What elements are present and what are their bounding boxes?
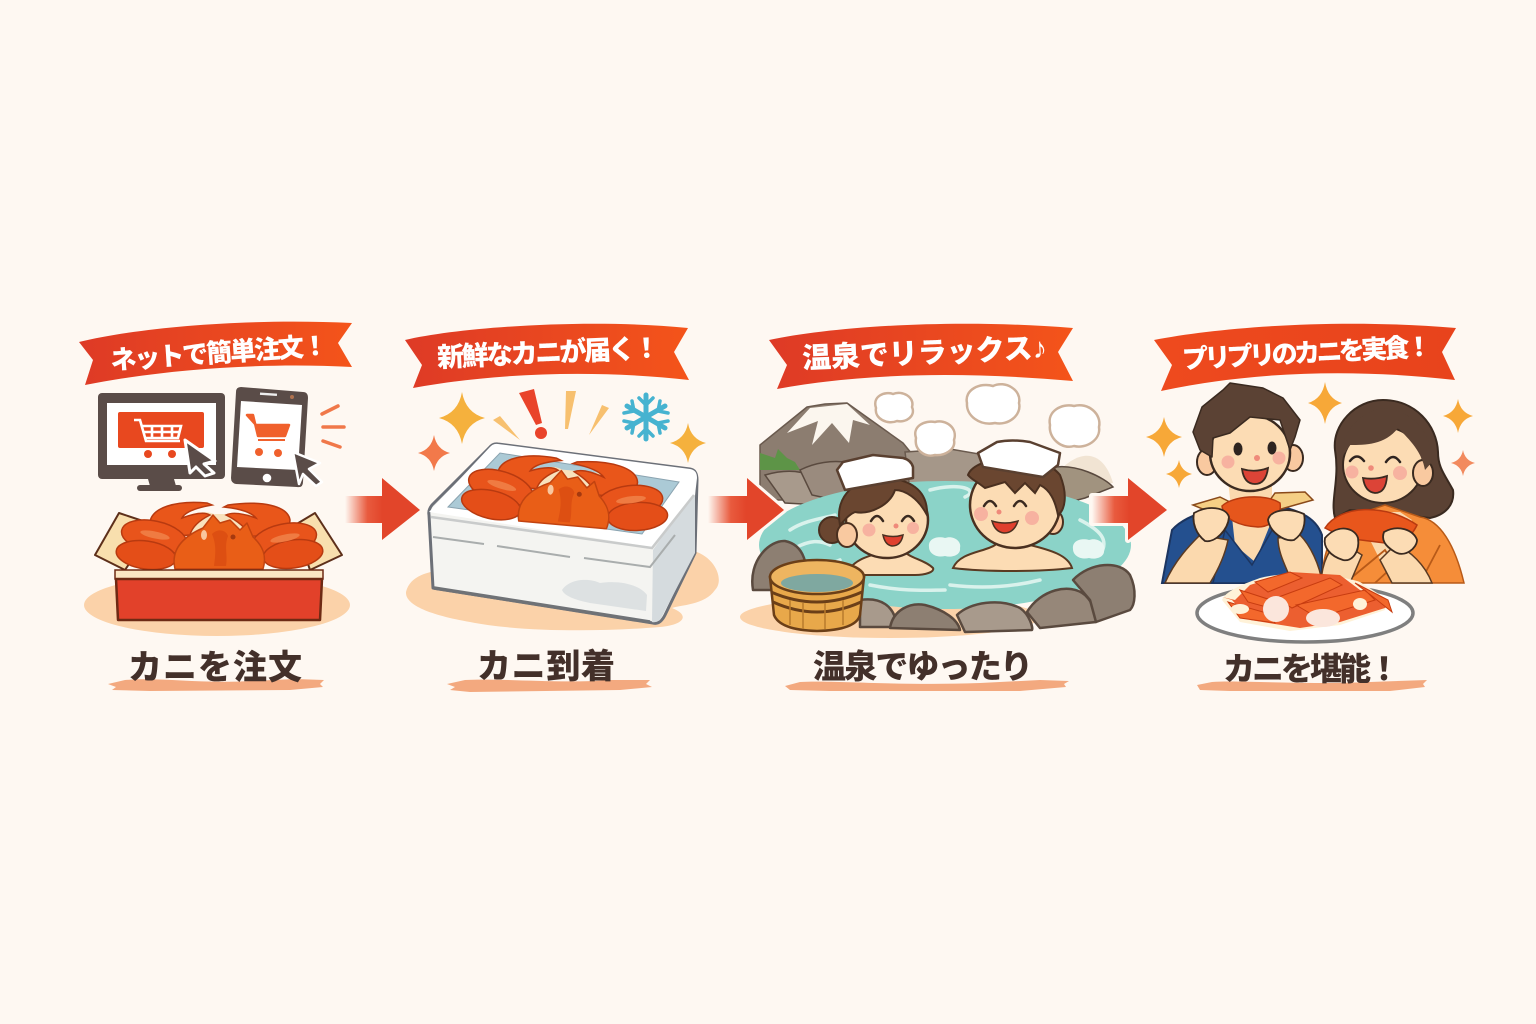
ribbon: eat: プリプリのカニを実食！: [1181, 331, 1433, 375]
icon: smartphone with cart: [231, 387, 322, 487]
label: arrives: [447, 648, 652, 692]
panel: order crab: [79, 322, 352, 691]
foam: [929, 537, 1104, 559]
icon: wooden bucket: [770, 560, 864, 631]
label: order crab: カニを注文: [128, 649, 302, 687]
sparkles: [418, 392, 706, 471]
sparkles: [1146, 382, 1475, 488]
label: relax: 温泉でゆったり: [813, 648, 1033, 685]
ground blob: [406, 550, 719, 630]
icon: desktop monitor with cart: [98, 393, 225, 491]
water: [759, 481, 1131, 609]
ribbon: order: [79, 322, 352, 385]
ribbon: order: ネットで簡単注文！: [109, 330, 329, 375]
mountain and back rocks: [760, 403, 1113, 505]
arrow 2: [708, 478, 784, 540]
label: enjoy: [1197, 651, 1427, 691]
label: arrives: カニ到着: [477, 648, 615, 686]
rocks: [752, 541, 1135, 632]
arrow 1: [345, 478, 420, 540]
ribbon: arrives: 新鮮なカニが届く！: [436, 332, 661, 373]
person: man in bath: [953, 440, 1072, 571]
ground ellipse: [740, 596, 1040, 638]
icon: crab box: [95, 502, 342, 620]
panel: enjoy crab: [1146, 324, 1475, 691]
person: man eating: [1162, 383, 1322, 583]
person: woman eating: [1321, 400, 1464, 583]
arrow 3: [1092, 478, 1167, 540]
icon: crab leg plate: [1197, 572, 1413, 642]
ribbon: eat: [1154, 324, 1456, 391]
icon: alert rays: [322, 406, 344, 447]
ribbon: relax: 温泉でリラックス♪: [801, 332, 1048, 375]
icon: exclamation: [519, 389, 547, 439]
ground ellipse: [84, 574, 350, 636]
rays: [493, 391, 609, 440]
icon: styrofoam cooler: [429, 444, 697, 623]
label: relax: [785, 648, 1069, 691]
ribbon: arrives: [405, 324, 689, 388]
label: enjoy: カニを堪能！: [1223, 651, 1400, 687]
person: woman in bath: [819, 455, 933, 575]
panel: crab arrives: [405, 324, 719, 692]
steam clouds: [875, 384, 1099, 456]
icon: snowflake: [624, 395, 668, 439]
ribbon: relax: [769, 324, 1073, 389]
panel: hot spring: [740, 324, 1135, 691]
